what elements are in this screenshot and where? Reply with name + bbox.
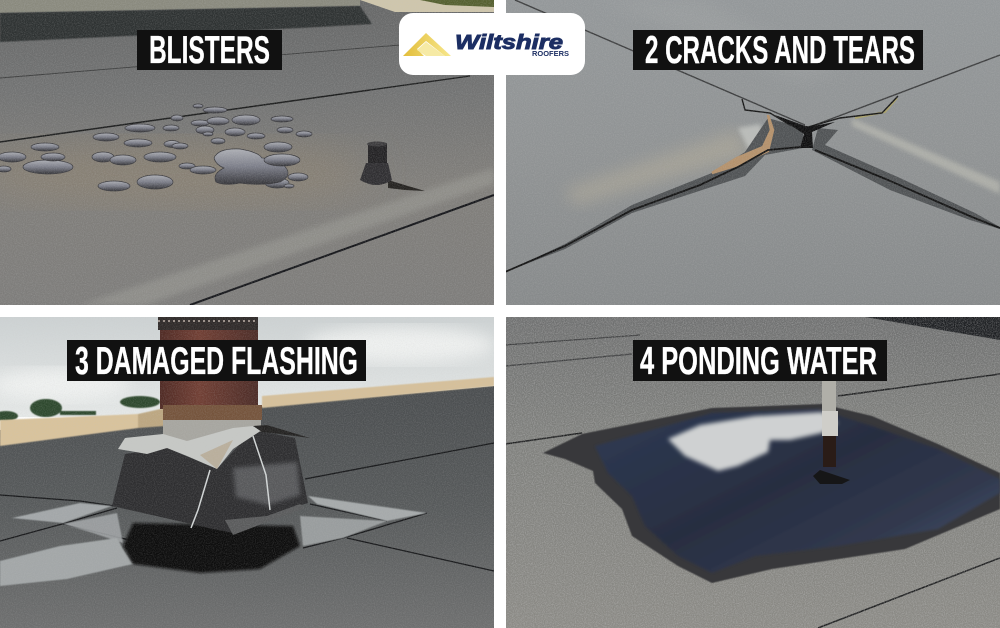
label: blisters [137,29,282,72]
label: ponding water [633,340,887,383]
wordmark: Wiltshire [455,32,563,54]
standing pipe and reflection [813,381,850,484]
water surface [595,409,1000,573]
puddle edge [543,404,1000,583]
torn metal flashing [118,426,262,469]
chimney pipe [158,317,262,442]
panel: ponding water [505,317,1000,628]
trees [0,396,160,421]
panel: damaged flashing [0,317,495,628]
panel: cracks and tears [505,0,1000,305]
label: blisters: BLISTERS [149,29,270,72]
parapet [0,377,494,446]
cloud reflection [668,412,838,471]
crack: tan exposed edge [712,115,773,173]
tagline: ROOFERS [532,51,569,58]
wet pale patches [0,496,427,586]
label: damaged flashing: 3 DAMAGED FLASHING [75,340,358,383]
blisters cluster [0,104,312,191]
membrane seams [0,443,494,571]
puddle [123,523,300,573]
vent stub [360,142,425,191]
logo: Wiltshire Roofers [399,13,585,75]
crack: wide torn edges [522,118,803,266]
water trickles [191,436,270,528]
icon: roof [403,33,451,56]
flashing box [112,430,308,533]
panel: blisters [0,0,494,305]
label: ponding water: 4 PONDING WATER [640,340,877,383]
label: damaged flashing [67,340,366,383]
crack: black fissure [505,147,1000,272]
